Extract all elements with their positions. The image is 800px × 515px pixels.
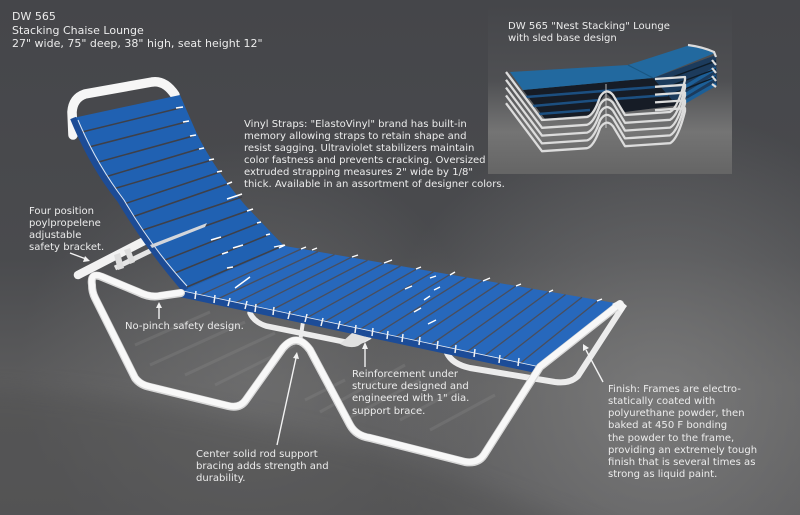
inset caption: with sled base design [508,33,617,44]
text: vinyl straps: thick. Available in an assortment of designer colors. [244,179,505,190]
seat highlights [235,245,602,324]
title block: Stacking Chaise Lounge [12,24,144,37]
backrest strap gaps [82,108,280,287]
text: center rod: durability. [196,473,245,484]
text: safety bracket: Four position [29,206,94,217]
text: finish: providing an extremely tough [608,445,757,456]
text: safety bracket: poylpropelene [29,218,101,229]
safety bracket [78,240,152,275]
text: safety bracket: adjustable [29,230,81,241]
text: vinyl straps: memory allowing straps to retain shape and [244,131,467,142]
seat front band [181,294,537,370]
text: finish: Finish: Frames are electro- [608,384,741,395]
arrow: center rod [277,352,299,445]
reinforcement brace [340,333,370,347]
text: reinforcement: engineered with 1" dia. [352,393,469,404]
chaise lounge [72,82,627,462]
arrow: finish [583,344,603,382]
text: vinyl straps: resist sagging. Ultraviolet stabilizers maintain [244,143,474,154]
frame corner cap [612,300,627,313]
arrow: no-pinch [156,302,162,319]
backrest highlights [176,107,285,268]
inset stack: white frames [506,45,716,151]
text: vinyl straps: Vinyl Straps: "ElastoVinyl" brand has built-in [244,119,467,130]
seat strap gaps [201,249,599,363]
title block: 27" wide, 75" deep, 38" high, seat height 12" [12,37,263,50]
seat straps [181,245,615,370]
inset panel: nest stacking lounge [488,5,732,174]
text: finish: baked at 450 F bonding [608,420,727,431]
text: reinforcement: support brace. [352,406,425,417]
text: finish: strong as liquid paint. [608,469,717,480]
text: vinyl straps: color fastness and prevents cracking. Oversized [244,155,486,166]
text: vinyl straps: extruded strapping measures 2" wide by 1/8" [244,167,473,178]
backrest top loop [72,82,175,135]
text: no-pinch: No-pinch safety design. [125,321,244,332]
main frame tube [92,275,620,462]
text: safety bracket: safety bracket. [29,242,104,253]
text: finish: the powder to the frame, [608,433,734,444]
floor shadow stripes [135,312,495,430]
arrow: reinforcement [362,342,368,367]
text: center rod: Center solid rod support [196,449,318,460]
text: center rod: bracing adds strength and [196,461,329,472]
inset stack: top straps [510,45,715,90]
text: finish: statically coated with [608,396,715,407]
text: reinforcement: Reinforcement under [352,369,459,380]
inset caption: DW 565 "Nest Stacking" Lounge [508,21,670,32]
seat front band ticks [195,291,519,366]
text: finish: finish that is several times as [608,457,755,468]
backrest straps [73,95,285,291]
text: finish: polyurethane powder, then [608,408,745,419]
inset stack: dark underside [510,45,717,119]
text: reinforcement: structure designed and [352,381,469,392]
title block: DW 565 [12,10,56,23]
rear frame tubes [250,308,622,382]
arrow: safety bracket [70,253,90,262]
